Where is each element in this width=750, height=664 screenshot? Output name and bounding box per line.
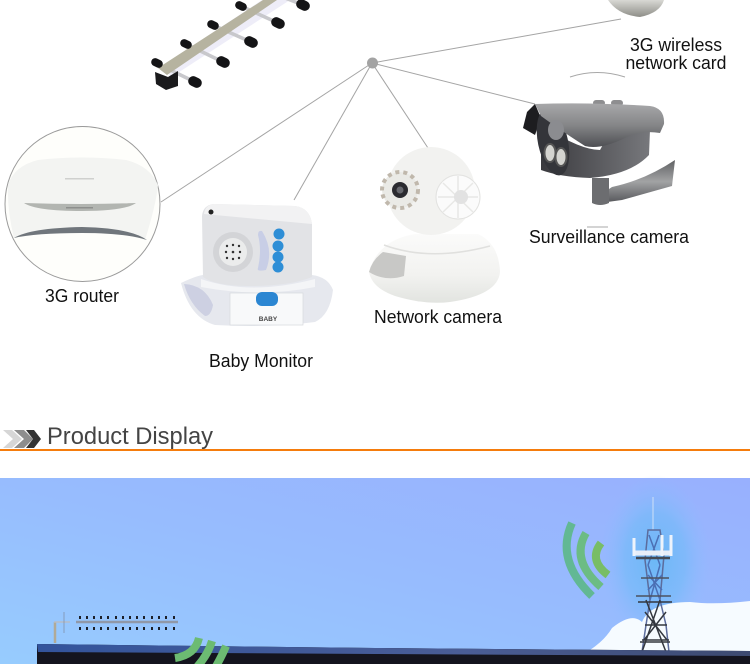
icon: cell tower <box>634 497 672 652</box>
label: 3G wireless network card <box>626 35 726 73</box>
icon: signal waves right <box>567 523 608 596</box>
label: 3G wireless network card: network card <box>626 53 726 73</box>
section heading: Product Display <box>0 423 750 451</box>
icon: surveillance camera <box>523 72 675 227</box>
icon: 3G wireless network card <box>608 0 664 17</box>
icon: signal waves left <box>175 638 226 664</box>
icon: network camera <box>369 147 500 303</box>
icon: Yagi antenna <box>150 0 311 90</box>
section heading: Product Display: Product Display <box>47 423 213 450</box>
label: 3G router: 3G router <box>45 286 119 306</box>
connector lines from hub to devices <box>161 19 621 202</box>
product photo: rooftop scene <box>0 475 750 664</box>
roof building <box>37 644 750 664</box>
icon: baby monitor <box>181 204 333 326</box>
cloud <box>590 601 750 652</box>
label: Baby Monitor: Baby Monitor <box>209 351 313 371</box>
label: Surveillance camera: Surveillance camera <box>529 227 690 247</box>
label: 3G wireless network card: 3G wireless <box>630 35 722 55</box>
icon: baby monitor: BABY <box>259 316 278 323</box>
icon: triple chevron <box>3 430 41 448</box>
hub dot <box>367 58 378 68</box>
label: Network camera: Network camera <box>374 307 503 327</box>
icon: 3G router in circle <box>5 126 160 282</box>
icon: Yagi antenna on roof <box>54 612 178 643</box>
